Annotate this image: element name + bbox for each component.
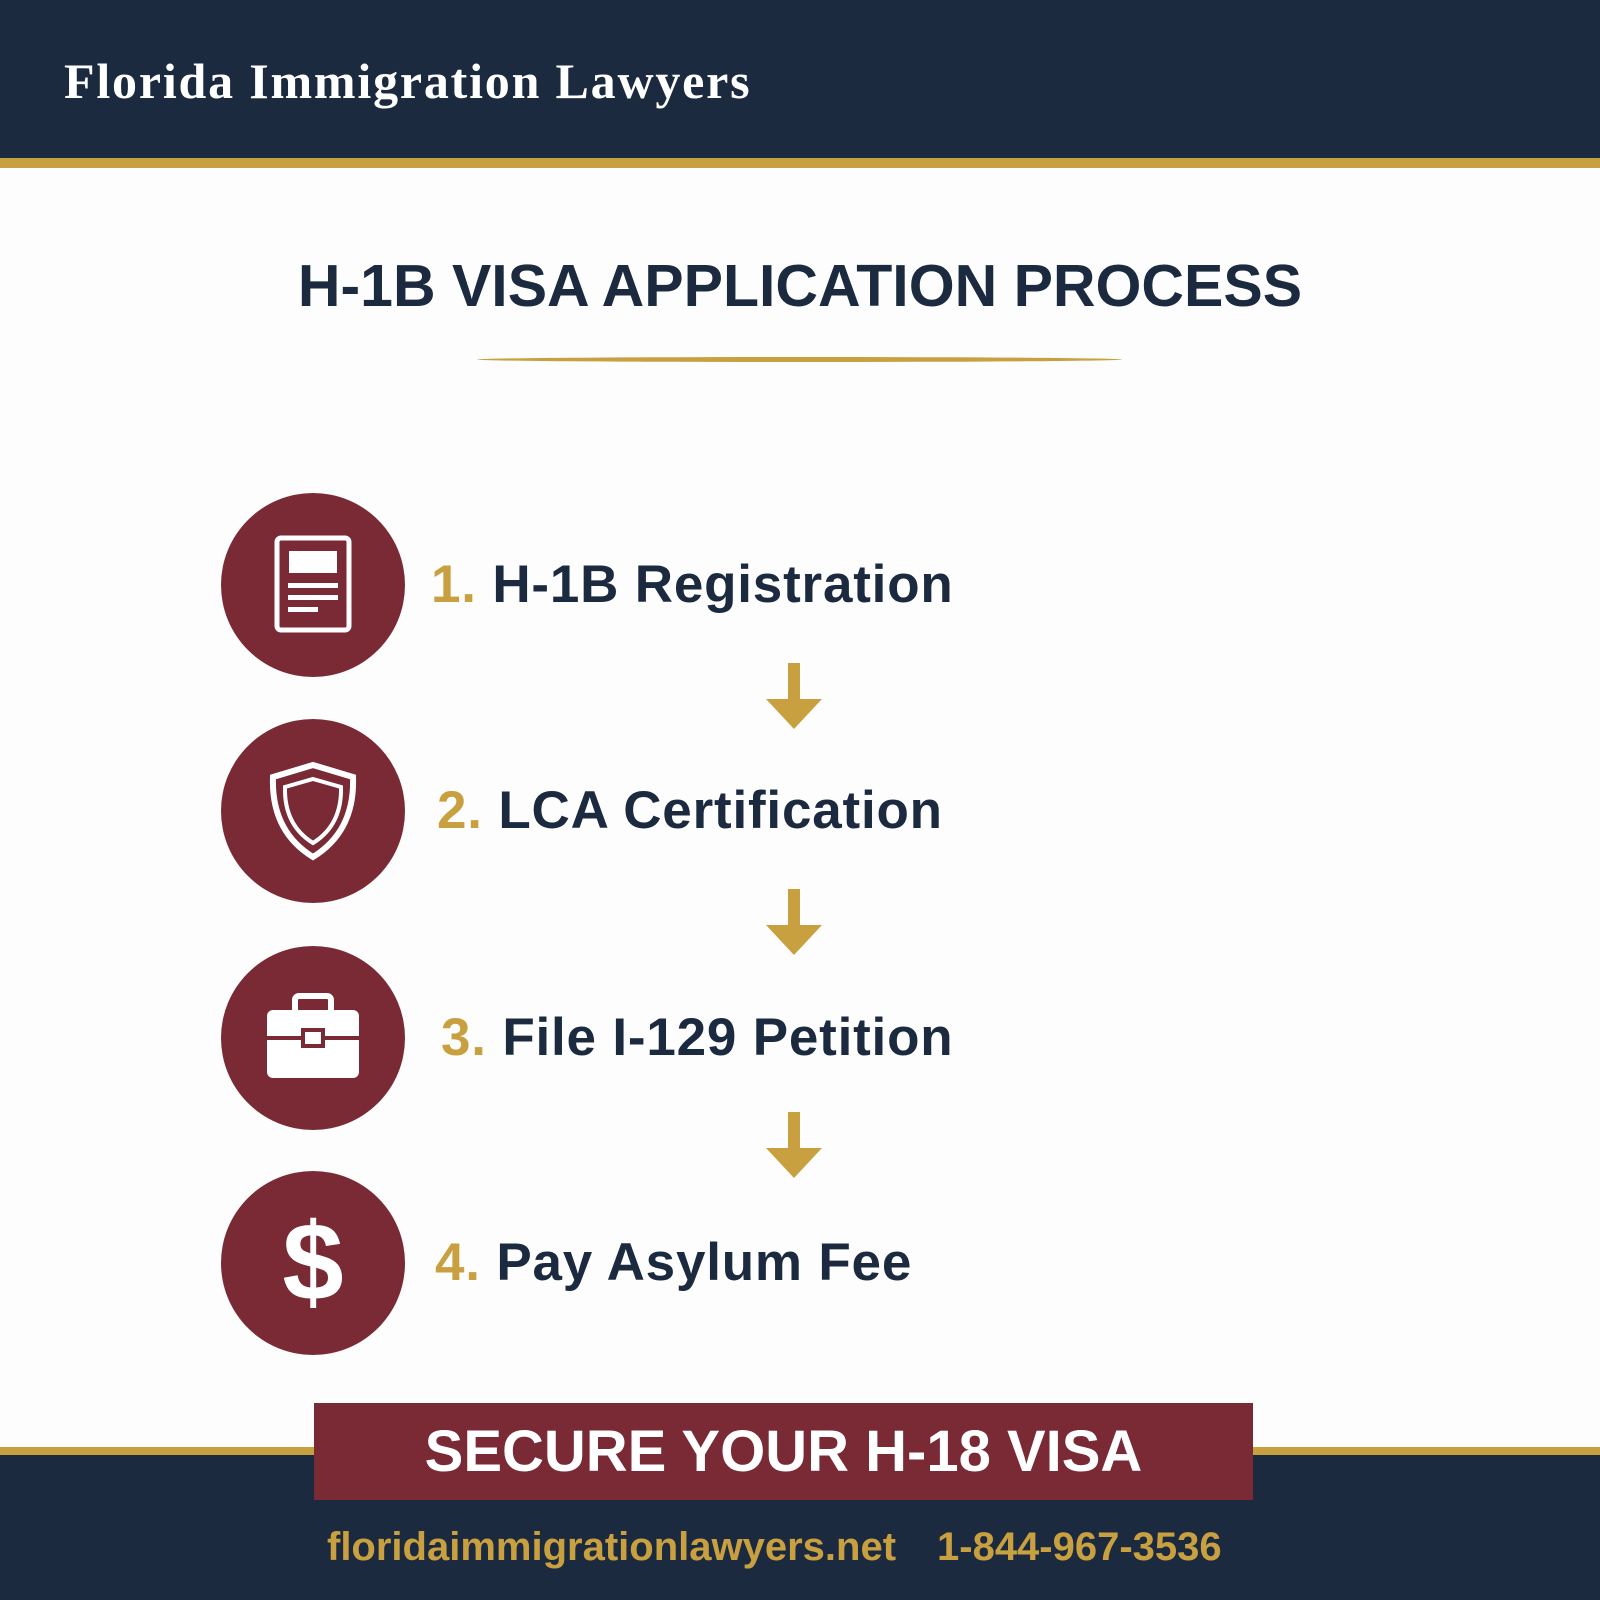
step 1 icon: document <box>221 493 405 677</box>
step 2 label: 2. LCA Certification <box>437 781 943 840</box>
arrow 1 <box>766 663 822 729</box>
step 4 label: 4. Pay Asylum Fee <box>435 1233 912 1292</box>
footer band <box>0 1447 1600 1600</box>
arrow 3 <box>766 1112 822 1178</box>
step 4 icon: dollar <box>221 1171 405 1355</box>
footer band: 1-844-967-3536 <box>937 1525 1222 1569</box>
footer band: floridaimmigrationlawyers.net <box>327 1525 896 1569</box>
arrow 2 <box>766 889 822 955</box>
CTA banner: SECURE YOUR H-18 VISA <box>425 1419 1142 1484</box>
step 1 label: 1. H-1B Registration <box>431 555 954 614</box>
header title: Florida Immigration Lawyers <box>64 53 751 109</box>
footer contact <box>327 1525 1222 1569</box>
CTA banner <box>314 1403 1253 1500</box>
main title: H-1B VISA APPLICATION PROCESS <box>298 253 1302 319</box>
header band <box>0 0 1600 168</box>
title underline <box>477 357 1122 362</box>
step 3 label: 3. File I-129 Petition <box>441 1008 953 1067</box>
step 4 icon: dollar: $ <box>282 1201 344 1324</box>
step 2 icon: shield <box>221 719 405 903</box>
step 3 icon: briefcase <box>221 946 405 1130</box>
